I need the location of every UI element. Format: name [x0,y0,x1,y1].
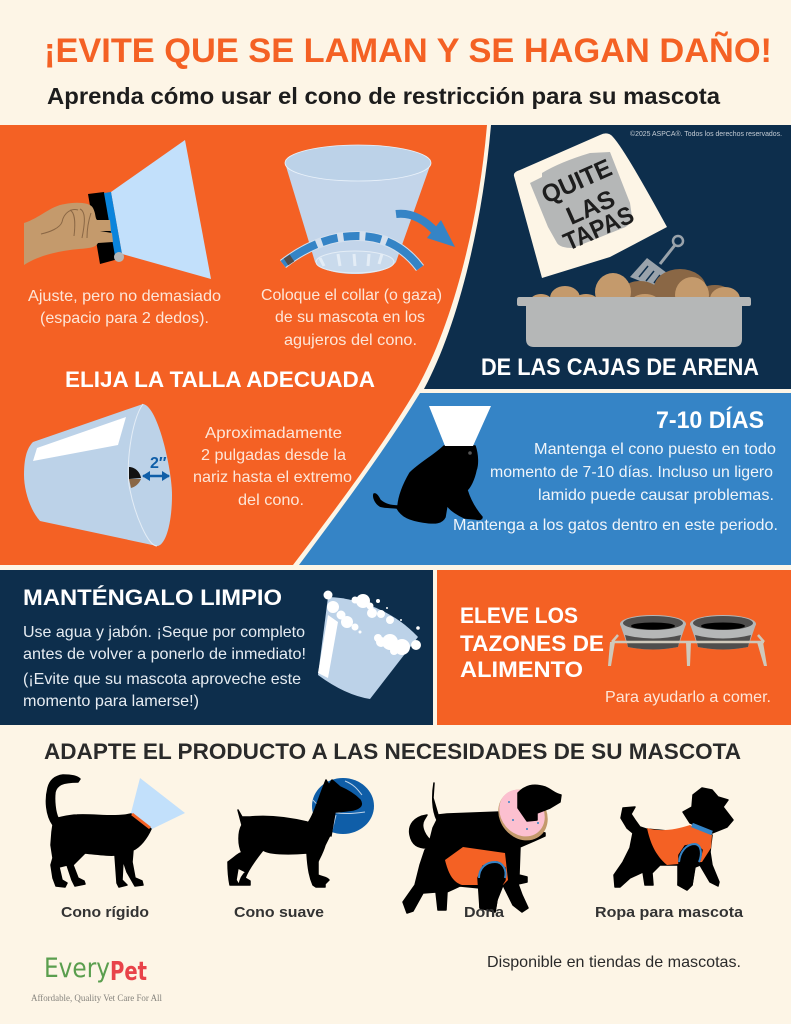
title: ¡EVITE QUE SE LAMAN Y SE HAGAN DAÑO! [44,32,772,70]
heading: raise bowls: TAZONES DE [460,631,604,656]
heading: litter boxes: DE LAS CAJAS DE ARENA [481,354,759,381]
text: soap and water: Use agua y jabón. ¡Seque por completo [23,624,305,641]
text: adjust [28,288,221,327]
text: two inches: 2 pulgadas desde la [201,447,346,464]
text: keep cone on [453,441,778,534]
item: pet clothing dog [595,788,744,921]
heading: raise bowls: ELEVE LOS [460,603,578,628]
label: rigid cone: Cono rígido [61,904,149,921]
icon: litter tray with scoop [517,236,751,347]
icon: cone side view with 2 inch measure [24,404,172,546]
text: soap and water [23,624,306,710]
icon: remove lid card: LAS [562,185,619,231]
text: two inches [193,425,352,509]
panel: litter box [424,125,791,389]
icon: raised double bowls [608,615,767,666]
icon: soapy cone [318,590,421,699]
panel: 7-10 days [299,393,791,565]
logo: EveryPet: Pet [110,957,147,987]
text: place collar: Coloque el collar (o gaza) [261,287,442,304]
heading: adapt product: ADAPTE EL PRODUCTO A LAS NECESIDADES DE SU MASCOTA [44,739,741,764]
text: adjust: Ajuste, pero no demasiado [28,288,221,305]
text: helps eating: Para ayudarlo a comer. [605,689,771,706]
item: soft cone dog [228,778,374,921]
heading: choose size: ELIJA LA TALLA ADECUADA [65,367,375,392]
text: available in pet stores: Disponible en tiendas de mascotas. [487,954,741,971]
text: two inches: nariz hasta el extremo [193,469,352,486]
text: soap and water: antes de volver a ponerlo de inmediato! [23,646,306,663]
text: soap and water: momento para lamerse!) [23,693,199,710]
text: keep cone on: Mantenga el cono puesto en todo [534,441,776,458]
item: rigid cone cat [46,775,185,921]
heading: raise bowls [460,603,604,682]
label: pet clothing: Ropa para mascota [595,904,744,921]
panel: choose the right size [0,125,487,565]
panel: keep it clean [0,570,433,725]
subtitle: Aprenda cómo usar el cono de restricción para su mascota [47,83,721,109]
heading: keep it clean: MANTÉNGALO LIMPIO [23,585,282,610]
icon: remove lid card [514,133,667,278]
icon: remove lid card: TAPAS [559,201,638,257]
text: keep cone on: momento de 7-10 días. Incluso un ligero [490,464,773,481]
icon: remove lid card: QUITE [537,154,616,210]
label: soft cone: Cono suave [234,904,324,921]
item: donut dog [403,780,561,921]
text: place collar: de su mascota en los [275,309,425,326]
text: place collar [261,287,442,349]
icon: clear cone with collar [283,145,455,274]
text: two inches: Aproximadamente [205,425,342,442]
logo: EveryPet: Affordable, Quality Vet Care For All [31,993,162,1003]
text: place collar: agujeros del cono. [284,332,417,349]
label: donut: Dona [464,904,505,921]
text: adjust: (espacio para 2 dedos). [40,310,209,327]
logo: EveryPet [31,953,162,1003]
heading: 7-10 days: 7-10 DÍAS [656,406,764,434]
icon: cone side view with 2 inch measure: 2″ [150,455,167,472]
text: keep cone on: lamido puede causar problemas. [538,487,774,504]
panel: raise bowls [437,570,791,725]
icon: hand fitting cone [24,140,211,279]
copyright: ©2025 ASPCA®. Todos los derechos reservados. [630,130,782,138]
text: two inches: del cono. [238,492,304,509]
text: soap and water: (¡Evite que su mascota aproveche este [23,671,301,688]
heading: raise bowls: ALIMENTO [460,657,583,682]
logo: EveryPet: Every [44,953,110,984]
icon: sitting dog with cone [374,406,491,523]
text: keep cone on: Mantenga a los gatos dentro en este periodo. [453,517,778,534]
